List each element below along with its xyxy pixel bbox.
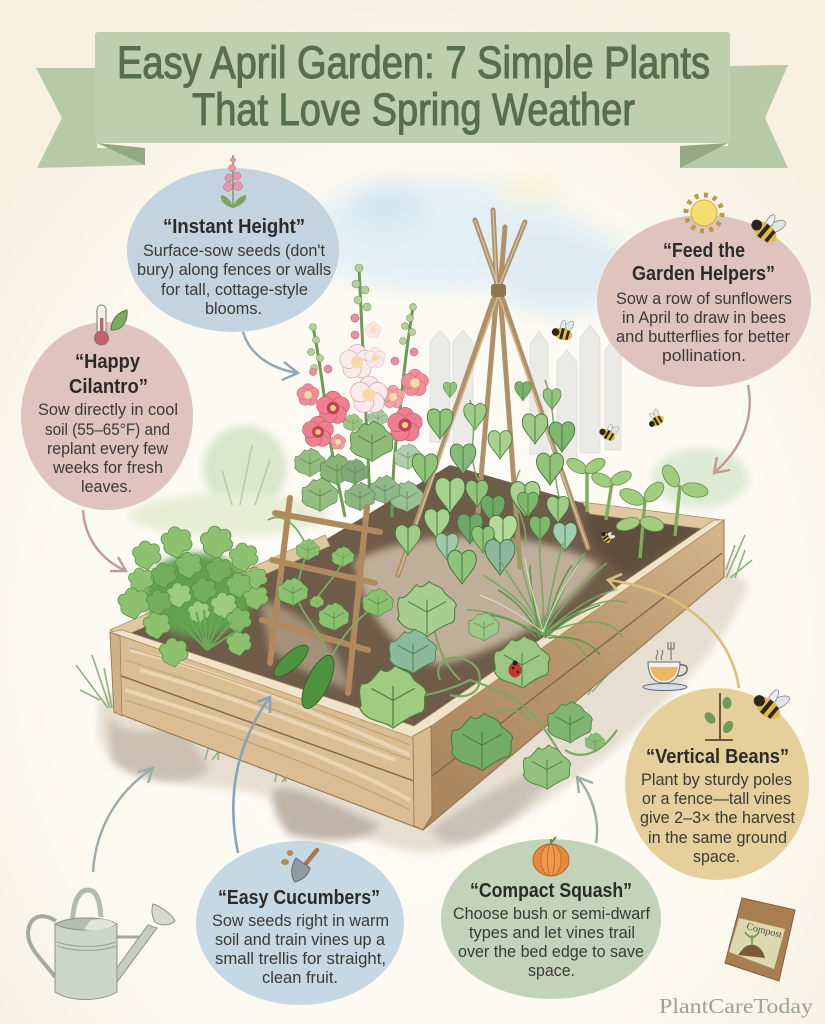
arrow: instant height [243,332,298,380]
arrow: cilantro [83,510,126,571]
icon: teacup [643,642,687,690]
icon: foxglove [221,155,246,208]
panel: happy cilantro [21,305,193,510]
body text [212,912,389,987]
body text: space. [528,962,575,980]
heading [632,239,775,285]
bed right face [414,520,724,830]
body text [616,290,792,365]
bed plank lines and rim [113,553,722,783]
body text: space. [693,848,740,866]
panel: easy cucumbers [196,841,404,1005]
icon: watering can [28,890,175,1000]
picket fence [430,325,621,462]
cucumber trellis [262,498,393,713]
watermark: PlantCareToday [659,994,814,1018]
icon: bean pole [702,693,735,740]
body text: soil and train vines up a [215,931,386,949]
body text: or a fence—tall vines [642,790,791,808]
heading: “Feed the [663,239,745,262]
panel: instant height [127,155,339,332]
body text: weeks for fresh [52,459,163,477]
body text: Surface-sow seeds (don't [143,242,325,260]
body text: bury) along fences or walls [137,261,331,279]
seedlings [564,455,709,558]
arrow: compact squash [577,777,597,843]
body text: types and let vines trail [469,924,635,942]
arrow: watering can [93,768,153,872]
icon: sun [686,195,722,231]
body text [640,771,795,866]
title banner [36,32,788,168]
garden bees [550,316,666,545]
squash vines [359,582,617,789]
bed soil [122,465,712,730]
icon: trowel [281,850,317,882]
body text: soil (55–65°F) and [45,421,170,439]
body text [137,242,331,318]
arrow: easy cucumbers [233,697,270,853]
raised garden bed [110,465,724,830]
cucumbers [269,640,341,713]
body text: Plant by sturdy poles [641,771,792,789]
icon: compost bag [725,898,795,981]
body text: leaves. [81,478,132,496]
body text: give 2–3× the harvest [640,809,795,827]
ground shadow under bed [98,540,748,852]
heading [69,350,148,398]
body text: Sow a row of sunflowers [616,290,792,308]
body text: blooms. [205,300,262,318]
panel: feed the garden helpers [597,195,811,387]
heading: Cilantro” [69,375,148,398]
ribbon right tail [680,65,788,168]
heading: “Instant Height” [163,215,305,238]
background bushes [130,426,748,537]
arrow: garden helpers [714,385,750,473]
body text: replant every few [47,440,168,458]
bed back rim [110,502,723,636]
title line 2: That Love Spring Weather [192,84,635,135]
body text [38,401,178,496]
heading: Garden Helpers” [632,262,775,285]
body text: Sow seeds right in warm [212,912,389,930]
wood grain [125,650,410,800]
hollyhock plants [295,264,429,517]
icon: compost bag: Compost [745,921,783,941]
heading: “Vertical Beans” [646,745,789,768]
title line 1: Easy April Garden: 7 Simple Plants [117,37,710,88]
body text: pollination. [662,347,746,365]
bean teepee [395,210,588,584]
body text: and butterflies for better [616,328,791,346]
arrow: vertical beans [608,574,739,688]
ladybug [508,660,522,678]
body text [453,905,650,980]
grass tufts [76,535,752,782]
body text: in April to draw in bees [622,309,786,327]
body text: Sow directly in cool [38,401,178,419]
body text: Choose bush or semi-dwarf [453,905,650,923]
heading: “Compact Squash” [470,879,632,902]
body text: for tall, cottage-style [161,281,308,299]
heading: “Happy [75,350,141,373]
body text: in the same ground [648,829,787,847]
panel: compact squash [441,837,661,999]
ribbon left tail [36,68,145,168]
cilantro [118,526,268,667]
body text: clean fruit. [262,969,338,987]
icon: bee [747,204,790,247]
chives [467,540,627,663]
body text: small trellis for straight, [215,950,386,968]
heading: “Easy Cucumbers” [218,886,380,909]
sky wash behind garden [300,174,630,315]
bed left face [110,632,423,830]
icon: thermometer [94,305,127,345]
body text: over the bed edge to save [458,943,644,961]
icon: bee [749,679,794,724]
panel: vertical beans [625,679,809,880]
ribbon main [95,32,730,143]
icon: pumpkin [533,837,569,876]
